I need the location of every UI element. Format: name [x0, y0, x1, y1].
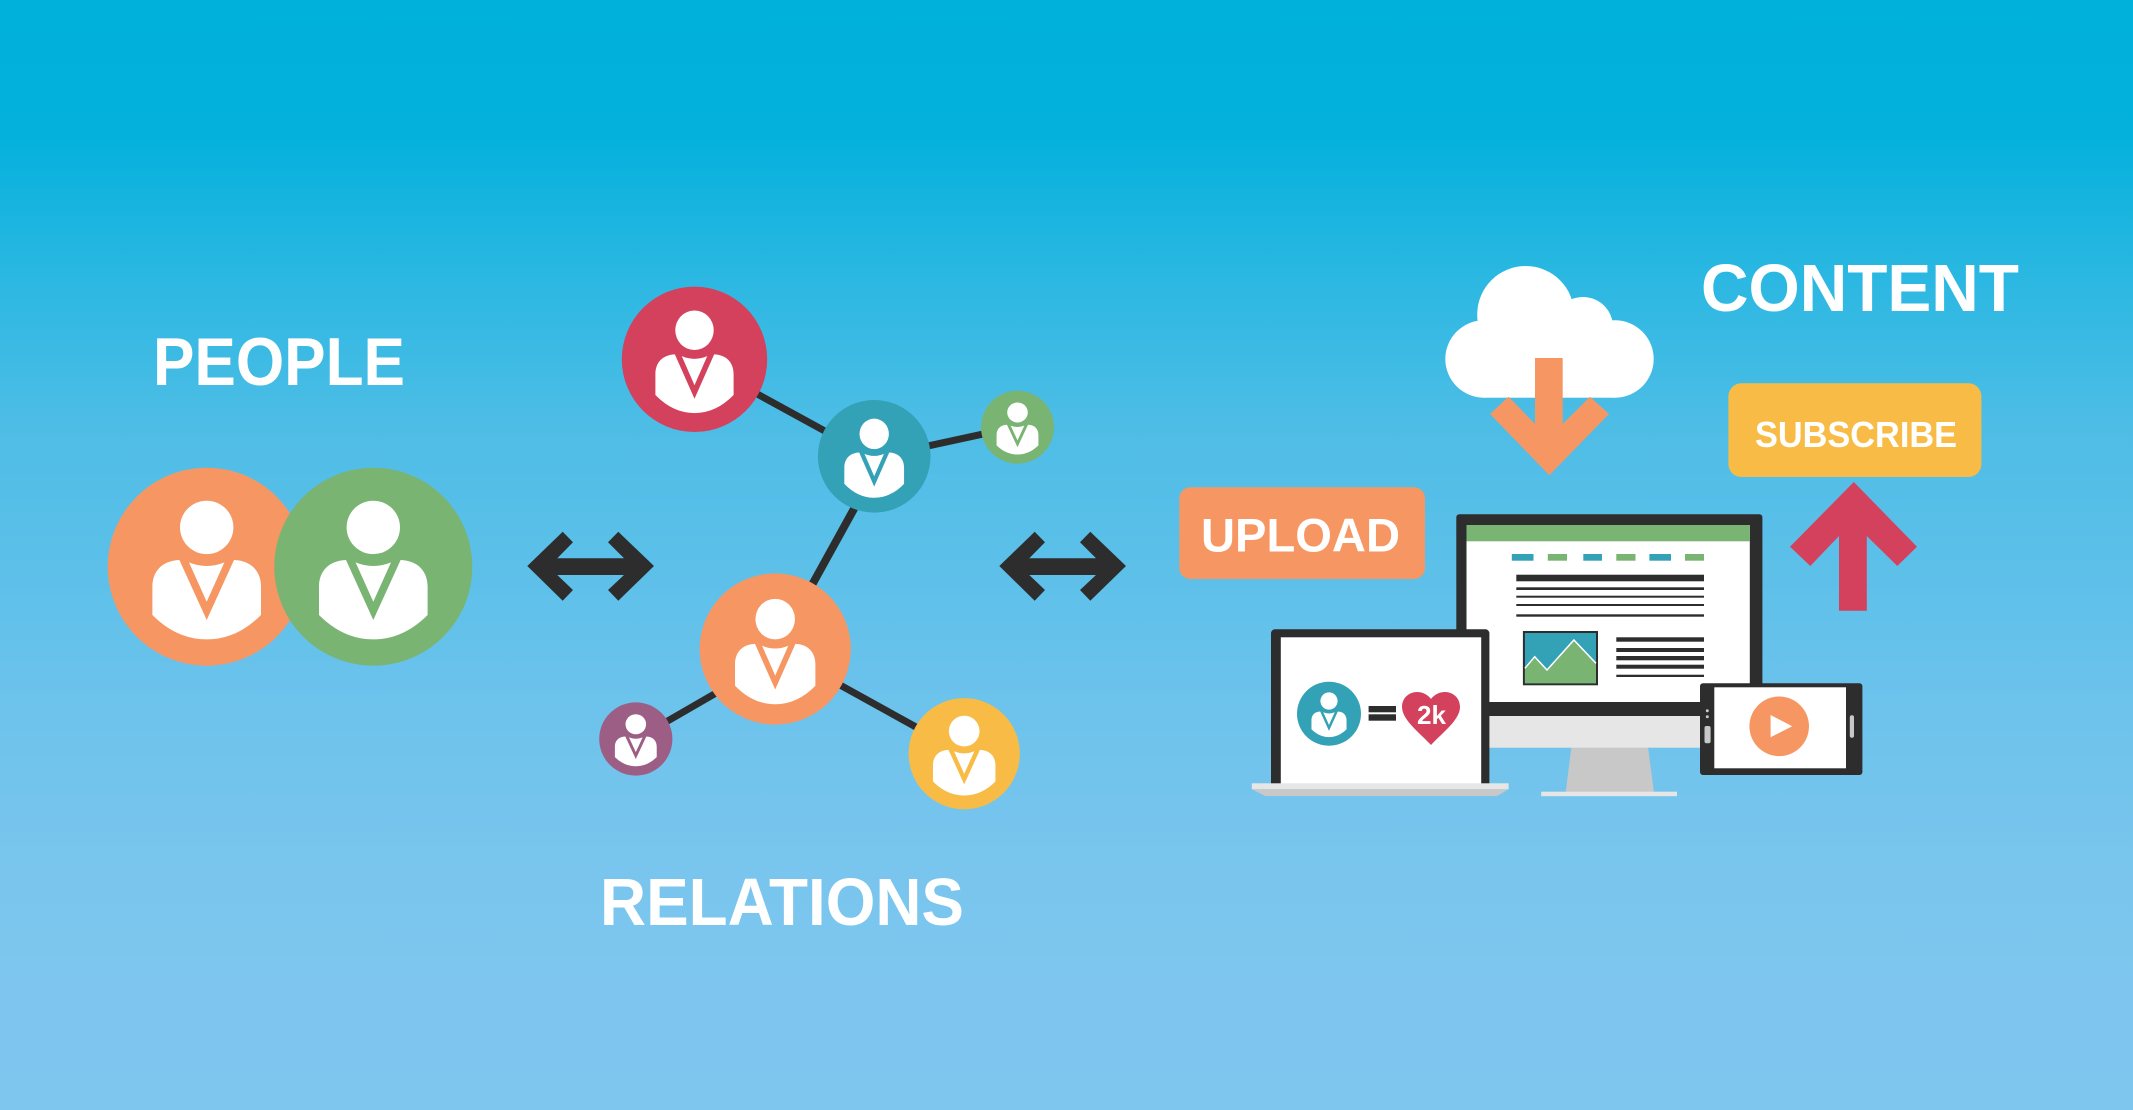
people pair icons: [108, 468, 472, 666]
icon: orange person: [700, 573, 851, 725]
icon: small green person: [981, 391, 1054, 464]
monitor bezel: [1456, 514, 1762, 716]
icon: teal person: [818, 400, 930, 513]
page side text: [1616, 637, 1704, 677]
arrow: download: [1490, 358, 1609, 475]
monitor stand: [1566, 747, 1654, 792]
icon: orange person: [108, 468, 306, 666]
tablet speaker dots: [1706, 709, 1709, 718]
network links: [659, 387, 991, 732]
heart with count: 2k: [1417, 700, 1447, 730]
button: subscribe: SUBSCRIBE: [1755, 414, 1957, 455]
tablet side buttons: [1704, 715, 1854, 743]
heading: content: CONTENT: [1701, 252, 2019, 326]
tablet body: [1700, 683, 1862, 775]
icon: play button: [1749, 696, 1809, 756]
desktop monitor: [1456, 514, 1762, 796]
page nav tabs: [1512, 554, 1704, 561]
icon: green person: [274, 468, 472, 666]
heart with count: [1402, 692, 1460, 745]
icon: cloud: [1445, 266, 1654, 398]
laptop lower edge: [1252, 789, 1509, 796]
tablet: [1700, 683, 1862, 775]
heading: relations: RELATIONS: [600, 866, 964, 940]
button: subscribe: [1728, 383, 1981, 477]
laptop: [1252, 629, 1509, 796]
monitor base: [1541, 792, 1677, 796]
arrow: people to relations: [527, 532, 654, 601]
button: upload: UPLOAD: [1201, 509, 1400, 562]
icon: purple person: [599, 702, 672, 776]
monitor chin: [1456, 712, 1762, 748]
page header: [1466, 525, 1750, 541]
laptop keyboard deck: [1252, 783, 1509, 789]
arrow: relations to content: [999, 532, 1126, 601]
arrow: upload: [1790, 482, 1917, 611]
button: upload: [1179, 487, 1425, 579]
relations network: [599, 287, 1054, 809]
tablet screen: [1714, 687, 1846, 768]
laptop screen: [1281, 637, 1481, 784]
icon: teal person: [1297, 682, 1361, 746]
icon: red person: [622, 287, 767, 432]
icon: yellow person: [909, 698, 1020, 809]
page text lines: [1516, 575, 1704, 617]
equals sign: [1369, 706, 1396, 721]
monitor screen: [1466, 525, 1750, 702]
heading: people: PEOPLE: [153, 324, 405, 400]
laptop bezel: [1271, 629, 1489, 784]
page image chart: [1524, 632, 1597, 684]
